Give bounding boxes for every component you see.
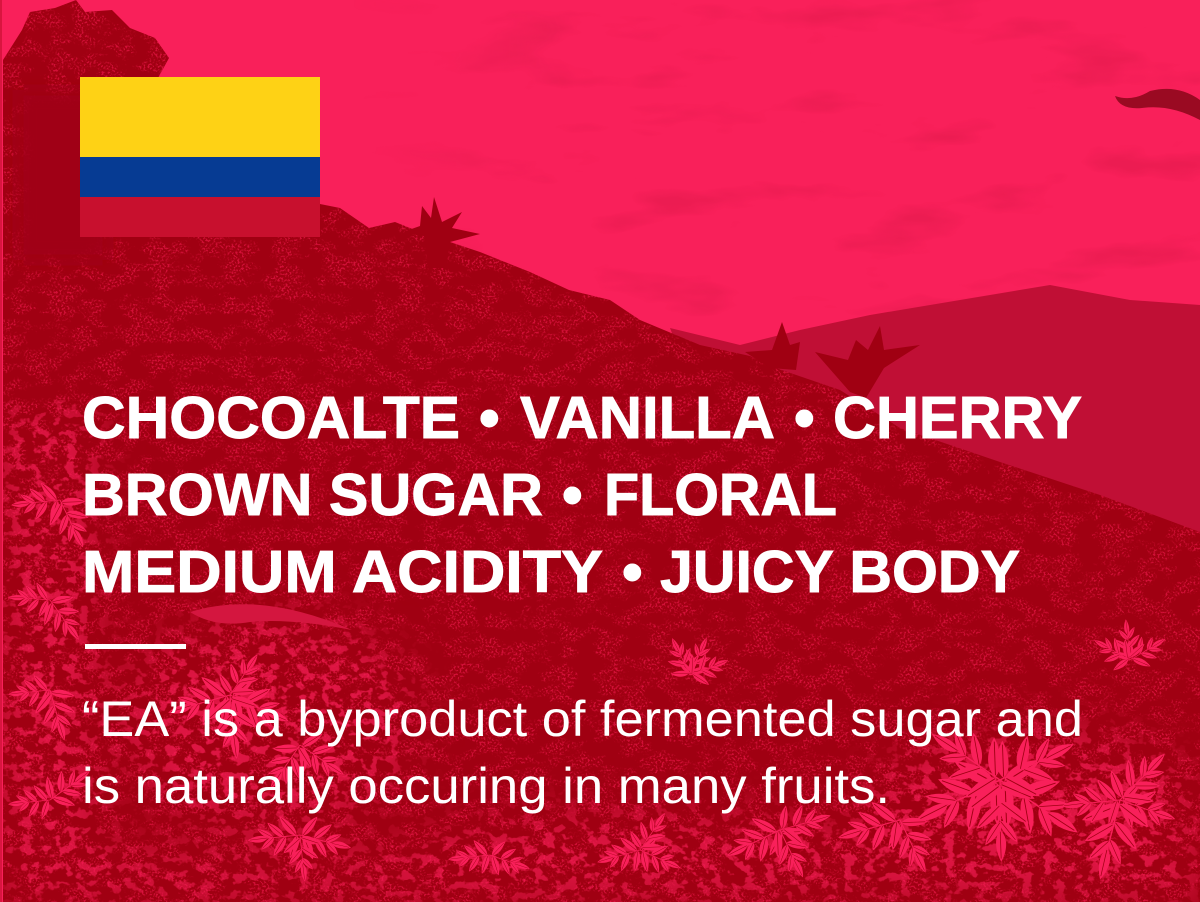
palm trees at mountain edge (745, 322, 920, 398)
flavor notes heading: CHOCOALTE (82, 385, 460, 451)
EA description: is naturally occuring in many fruits. (82, 758, 890, 814)
coffee plants foreground (5, 478, 1184, 888)
flavor notes heading: JUICY BODY (660, 539, 1020, 605)
flavor notes heading (82, 385, 1082, 605)
flavor notes heading: FLORAL (604, 462, 837, 528)
clouds (496, 0, 1200, 312)
distant mountain (670, 285, 1200, 560)
flavor notes heading: • (622, 539, 643, 605)
EA description: “EA” is a byproduct of fermented sugar and (82, 691, 1083, 747)
left edge stripe (0, 0, 2, 902)
flavor notes heading: MEDIUM ACIDITY (82, 539, 603, 605)
flavor notes heading: VANILLA (520, 385, 775, 451)
dark trunk shadow under flag (18, 90, 108, 260)
banana frond (190, 604, 352, 630)
EA description (82, 691, 1083, 814)
branch top right (1115, 89, 1200, 120)
flag of Colombia (80, 77, 320, 237)
foreground foliage texture (0, 400, 1200, 902)
flavor notes heading: • (479, 385, 500, 451)
flavor notes heading: • (794, 385, 815, 451)
flavor notes heading: CHERRY (833, 385, 1082, 451)
flavor notes heading: BROWN SUGAR (82, 462, 543, 528)
flavor notes heading: • (562, 462, 583, 528)
palm tree on ridge (403, 197, 480, 268)
divider rule (85, 644, 186, 649)
